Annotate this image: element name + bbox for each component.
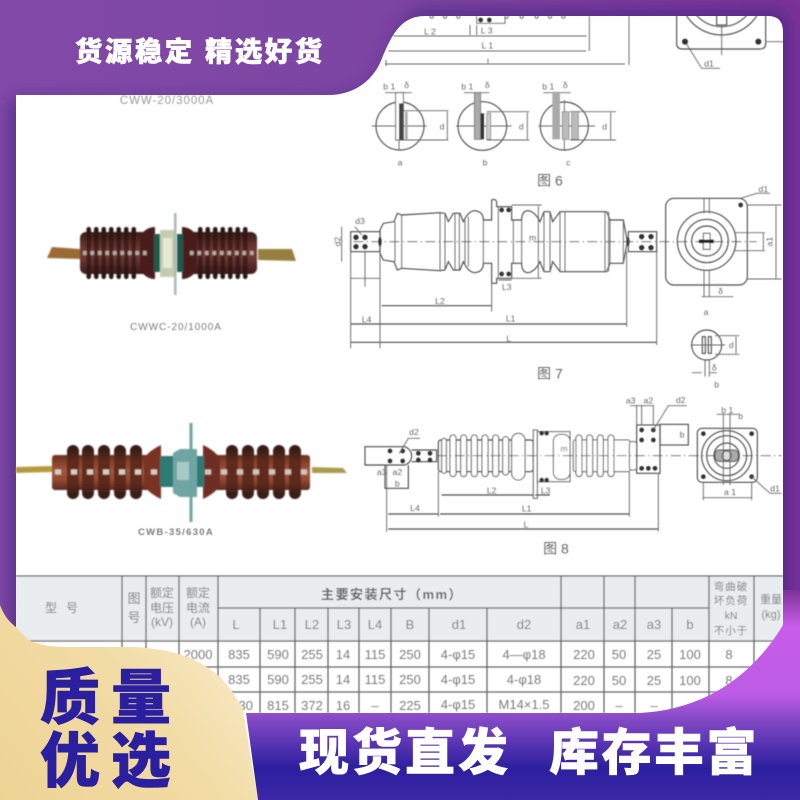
table header text: kN [725, 610, 737, 622]
table row 3: 1130 [225, 698, 253, 713]
insulator photo: CWWC-20/1000A [47, 213, 296, 295]
bottom-left cream badge [0, 605, 258, 800]
heading: top banner slogan: 精选好货 [205, 36, 325, 67]
table header text: a3 [647, 617, 661, 632]
table row 2: 115 [365, 672, 385, 687]
dimension lines: m [529, 233, 536, 243]
table row 3: 16 [336, 698, 350, 713]
table row 3: 4-φ15 [441, 697, 475, 712]
table row 2: 4-φ18 [507, 672, 541, 687]
caption: figure 8: 图 8 [543, 541, 569, 557]
diagram b: d [519, 121, 524, 131]
left terminal: b [395, 479, 400, 489]
table row 2: 14 [336, 672, 350, 687]
table row 2: 250 [399, 672, 421, 687]
table header text: 型号 [45, 601, 87, 615]
drawing: figure 6 [372, 80, 616, 188]
label: CWWC-20/1000A: CWWC-20/1000A [130, 322, 222, 333]
table row 1: 25 [647, 647, 661, 662]
end view: d1 [770, 484, 780, 494]
dimension lines: L4 [410, 503, 420, 513]
diagram c: b 1 [542, 81, 555, 91]
table header text: (kV) [151, 615, 173, 629]
table row 1: 115 [365, 647, 385, 662]
heading: top banner slogan [75, 36, 325, 67]
table header background [16, 576, 783, 641]
dimension lines: L3 [502, 282, 512, 292]
end view b [691, 330, 739, 389]
drawing: figure 5 fragment: L [487, 57, 492, 67]
badge text: 质量优选 [40, 665, 182, 795]
end view a [666, 184, 782, 317]
table row 3: 200 [573, 698, 595, 713]
end view a: a1 [765, 237, 775, 246]
dimension lines: L2 [487, 485, 497, 495]
table row 2: 100 [679, 673, 701, 688]
end view: b [738, 411, 743, 421]
dimension lines: d2 [333, 237, 343, 246]
end view b: δ [712, 363, 717, 373]
table row 2: 835 [228, 672, 250, 687]
diagram c: c [566, 157, 571, 167]
dimension lines: L4 [362, 315, 372, 325]
table row 1: 220 [573, 647, 595, 662]
table row 3: – [615, 698, 623, 713]
table header text: L4 [368, 617, 382, 632]
table row 2: 8 [725, 673, 733, 688]
diagram c: d [602, 121, 607, 131]
end view a: d1 [759, 184, 768, 194]
diagram c: δ [563, 80, 568, 90]
table row 3 [239, 699, 658, 712]
table row 3: – [650, 698, 658, 713]
dimension lines: L3 [541, 485, 551, 495]
drawing: figure 5 fragment: L 1 [481, 40, 493, 50]
diagram a: d [440, 121, 445, 131]
bottom purple banner [246, 590, 800, 800]
table header text: B [406, 617, 414, 632]
table row 2 [228, 674, 732, 687]
end view: b 1 [721, 405, 734, 415]
badge text: 质量优选: 质量 [40, 665, 182, 732]
table row 3: 225 [399, 698, 421, 713]
heading: top banner slogan: 货源稳定 [75, 36, 195, 67]
banner text: 现货直发 库存丰富: 库存丰富 [549, 725, 759, 781]
drawing: figure 5 fragment [384, 16, 783, 70]
table header text: (kg) [762, 609, 780, 621]
insulator body: m [560, 444, 568, 454]
diagram a: a [398, 157, 403, 167]
drawing: figure 8 [365, 395, 782, 557]
right terminal [626, 395, 688, 473]
diagram b: b [483, 157, 488, 167]
table row 2: 255 [301, 672, 323, 687]
caption: figure 6: 图 6 [537, 172, 563, 188]
left terminal: a3 [377, 467, 387, 477]
table row 3: 372 [301, 698, 323, 713]
drawing: figure 5 fragment: L 2 [424, 26, 436, 36]
diagram b [456, 80, 529, 167]
dimension lines: L2 [435, 296, 445, 306]
table header text: L3 [337, 617, 351, 632]
table header text: 坏负荷 [714, 594, 748, 607]
table header text: 弯曲破 [714, 580, 748, 593]
table header text: L2 [305, 617, 319, 632]
table row 3: – [686, 698, 694, 713]
end view [697, 405, 782, 500]
end view b: d [729, 340, 734, 350]
left terminal: a2 [393, 467, 402, 477]
table row 2: 4-φ15 [441, 672, 475, 687]
table header text: 图 [127, 591, 141, 606]
end view a: δ [718, 286, 723, 296]
specification table [16, 576, 783, 713]
left terminal [351, 232, 380, 252]
insulator photo: CWB-35/630A [16, 423, 347, 522]
table header text: 电压 [150, 601, 174, 615]
diagram a: b 1 [383, 81, 396, 91]
diagram b: b 1 [461, 81, 474, 91]
dimension lines: d3 [355, 216, 365, 226]
table header text: d2 [517, 617, 531, 632]
drawing: figure 5 fragment: d1 [704, 59, 714, 69]
caption: figure 7: 图 7 [537, 365, 563, 381]
table header text: (A) [190, 615, 206, 629]
table header text: 电流 [186, 601, 210, 615]
table header text: L1 [273, 617, 287, 632]
table row 3: – [371, 698, 379, 713]
table header text: 不小于 [714, 625, 748, 637]
table row 1: 8 [725, 647, 733, 662]
table row 1: 2 [773, 647, 781, 662]
table row 1 [184, 649, 733, 662]
banner text: 现货直发 库存丰富: 现货直发 [299, 725, 511, 781]
drawing: figure 5 fragment: L 3 [481, 25, 493, 35]
table row 1: 835 [228, 647, 250, 662]
table row 1: 50 [612, 647, 626, 662]
right terminal: d2 [676, 395, 686, 405]
dimension lines: L1 [506, 313, 516, 323]
diagram c [538, 80, 616, 167]
table row 2: 220 [573, 673, 595, 688]
diagram a [372, 80, 448, 167]
table row 2: 50 [612, 673, 626, 688]
table row 1: 100 [679, 647, 701, 662]
table header text: 重量 [760, 592, 782, 606]
table row 1: 255 [301, 647, 323, 662]
table header text: 号 [127, 610, 141, 625]
diagram b: δ [485, 80, 490, 90]
drawing: figure 7 [333, 184, 782, 389]
table header text: b [686, 617, 694, 632]
table header text: L [232, 617, 240, 632]
label: CWB-35/630A: CWB-35/630A [138, 527, 214, 538]
dimension lines [387, 465, 658, 532]
table header text: d1 [452, 617, 466, 632]
table header text: 额定 [186, 585, 210, 600]
end view: a 1 [724, 487, 736, 497]
right terminal: a2 [644, 396, 653, 406]
left terminal: d2 [409, 427, 419, 437]
table row 1: 250 [399, 647, 421, 662]
table row 3: M14×1.5 [499, 697, 549, 712]
table header text: a1 [576, 617, 590, 632]
label: CWW-20/3000A: CWW-20/3000A [120, 95, 214, 107]
table row 1: 590 [267, 647, 289, 662]
diagram a: δ [404, 80, 409, 90]
dimension lines: L [524, 520, 529, 530]
end view b: b [714, 379, 719, 389]
table row 2: 25 [647, 673, 661, 688]
table row 1: 2000 [184, 647, 212, 662]
end view a: a [704, 307, 709, 317]
right terminal: a3 [626, 396, 636, 406]
right terminal: b [680, 430, 685, 440]
table header text: 额定 [150, 585, 174, 600]
table header text: 主要安装尺寸（mm） [321, 587, 463, 602]
dimension lines: L1 [522, 504, 532, 514]
badge text: 质量优选: 优选 [40, 728, 182, 795]
table row 3: 815 [267, 698, 289, 713]
table header text [45, 580, 782, 637]
banner text: 现货直发 库存丰富 [299, 725, 759, 781]
table row 1: 4-φ15 [441, 647, 475, 662]
right terminal [628, 232, 657, 252]
insulator body [437, 430, 782, 498]
left terminal [365, 427, 437, 489]
table row 1: 14 [336, 647, 350, 662]
table row 1: 4—φ18 [502, 647, 546, 662]
insulator outline [353, 199, 757, 283]
table grid [16, 576, 783, 713]
dimension lines: L [506, 333, 511, 343]
dimension lines [333, 216, 657, 348]
table row 2: 590 [267, 672, 289, 687]
table header text: a2 [613, 617, 627, 632]
